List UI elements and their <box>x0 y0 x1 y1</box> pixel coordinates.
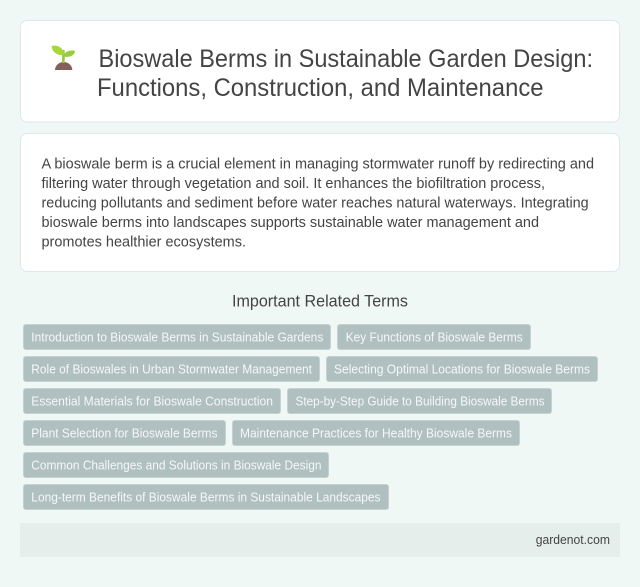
tag: step-by-step <box>288 388 552 414</box>
text block: description: promotes healthier ecosystems. <box>42 234 246 250</box>
tag: common challenges: Common Challenges and Solutions in Bioswale Design <box>31 458 322 472</box>
text block: description: reducing pollutants and sediment before water reaches natural waterways. Integrating <box>42 195 589 211</box>
tag: key functions <box>338 324 530 350</box>
tag: maintenance practices: Maintenance Practices for Healthy Bioswale Berms <box>240 426 512 440</box>
tag: long-term benefits <box>24 484 388 510</box>
tag: essential materials: Essential Materials for Bioswale Construction <box>31 394 273 408</box>
tag: plant selection: Plant Selection for Bioswale Berms <box>31 426 217 440</box>
tag: plant selection <box>24 420 226 446</box>
tag: step-by-step: Step-by-Step Guide to Building Bioswale Berms <box>296 394 544 408</box>
tag: role of bioswales: Role of Bioswales in Urban Stormwater Management <box>31 362 312 376</box>
heading: title <box>97 46 593 102</box>
icon: seedling <box>52 46 75 70</box>
tag: introduction: Introduction to Bioswale Berms in Sustainable Gardens <box>31 330 323 344</box>
panel: description card <box>20 134 620 272</box>
text block: description: bioswale berms into landscapes supports sustainable water management and <box>42 215 539 231</box>
tag: essential materials <box>24 388 280 414</box>
tag: selecting locations <box>326 356 598 382</box>
tag: selecting locations: Selecting Optimal Locations for Bioswale Berms <box>334 362 590 376</box>
footer: gardenot.com <box>536 532 610 547</box>
text block: description: filtering water through vegetation and soil. It enhances the biofiltration process, <box>42 176 545 192</box>
tag: role of bioswales <box>24 356 320 382</box>
text block: description: A bioswale berm is a crucial element in managing stormwater runoff by redirecting and <box>42 156 594 172</box>
tag: key functions: Key Functions of Bioswale Berms <box>346 330 523 344</box>
tag: maintenance practices <box>232 420 520 446</box>
heading: important related terms: Important Related Terms <box>232 293 408 311</box>
heading: title: Functions, Construction, and Maintenance <box>97 75 544 102</box>
panel: title card <box>20 20 620 122</box>
footer <box>20 523 620 557</box>
tag: common challenges <box>24 452 328 478</box>
text block: description <box>42 156 594 250</box>
tag: long-term benefits: Long-term Benefits of Bioswale Berms in Sustainable Landscapes <box>31 490 381 504</box>
heading: title: Bioswale Berms in Sustainable Garden Design: <box>98 46 593 73</box>
tag: introduction <box>24 324 330 350</box>
